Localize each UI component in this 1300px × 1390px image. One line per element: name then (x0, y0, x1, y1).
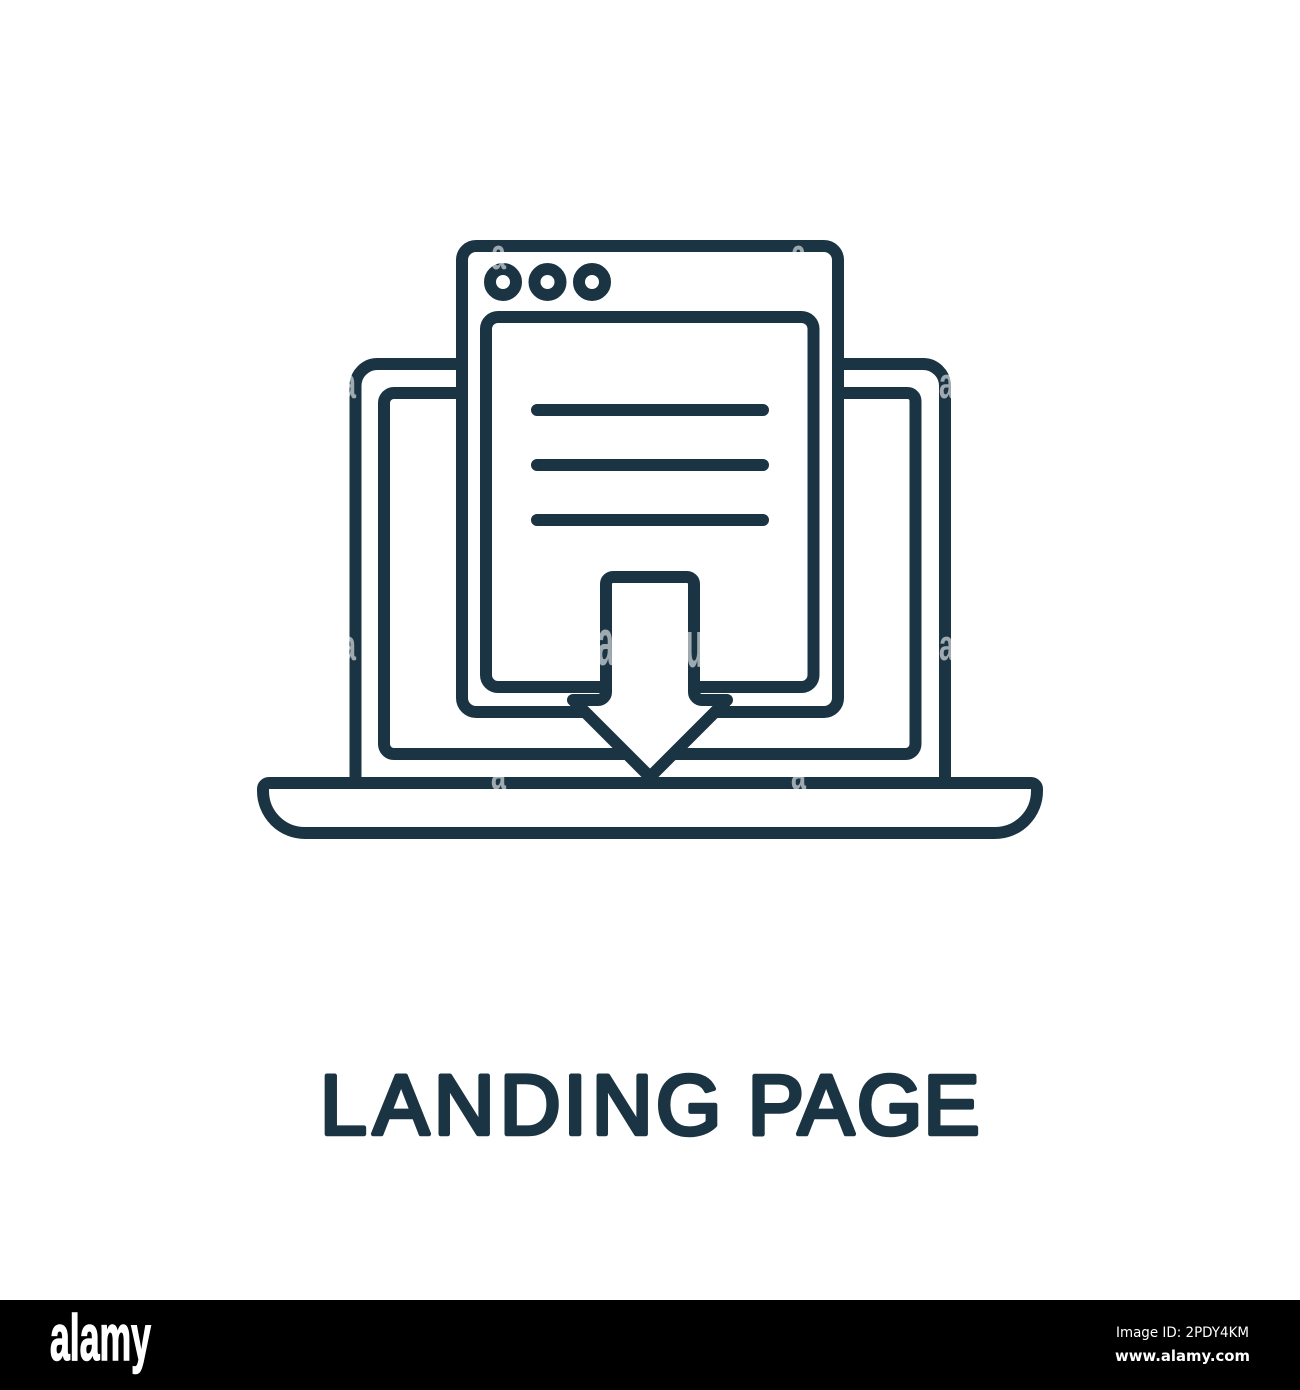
stock watermark fragments: a (791, 230, 806, 279)
footer bar (0, 1300, 1300, 1390)
page panel inside browser (486, 317, 814, 687)
logo: alamy: alamy (50, 1301, 151, 1374)
stock watermark fragments: a (341, 359, 356, 408)
stock watermark fragments: u (686, 607, 703, 681)
website address: www.alamy.com (1115, 1347, 1250, 1365)
laptop screen outer frame (356, 364, 945, 784)
page text lines (537, 410, 763, 520)
image id: Image ID: 2PDY4KM (1116, 1325, 1249, 1341)
stock watermark fragments: a (939, 359, 954, 408)
stock watermark fragments: a (597, 605, 615, 679)
title: LANDING PAGE (320, 1058, 980, 1152)
icon: landing page on laptop (263, 246, 1037, 833)
browser window dots (490, 269, 605, 295)
laptop base (263, 783, 1037, 833)
stock watermark fragments: a (341, 621, 356, 670)
stock watermark fragments: a (491, 750, 506, 799)
stock watermark fragments: a (939, 621, 954, 670)
browser window (462, 246, 838, 712)
laptop screen inner frame (384, 393, 916, 754)
stock watermark fragments: a (491, 230, 506, 279)
stock watermark fragments (341, 230, 954, 799)
download arrow (573, 577, 727, 777)
stock watermark fragments: a (791, 750, 806, 799)
